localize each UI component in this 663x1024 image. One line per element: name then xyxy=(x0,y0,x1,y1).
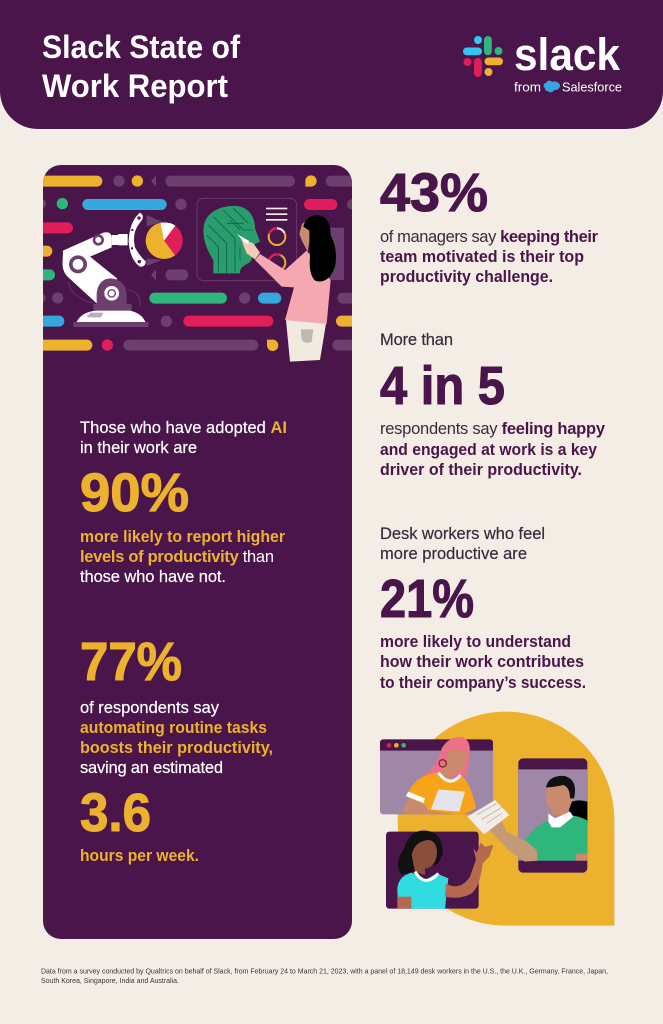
text block: managers stat: of managers say keeping their xyxy=(380,228,599,246)
text block: AI adoption: Those who have adopted AI xyxy=(80,419,287,437)
panel: AI and automation xyxy=(33,165,364,939)
text block: automation: boosts their productivity, xyxy=(80,739,273,757)
screen xyxy=(197,198,297,281)
text block: happiness stat xyxy=(380,331,606,479)
window 1 xyxy=(380,739,493,814)
text block: managers stat xyxy=(380,163,599,286)
text block: desk workers stat xyxy=(380,525,586,692)
text block: desk workers stat: 21% xyxy=(380,569,474,629)
text block: happiness stat: driver of their productivity. xyxy=(380,461,582,479)
text block: desk workers stat: more likely to understand xyxy=(380,633,571,651)
text block: hours saved xyxy=(80,783,199,865)
window 3 xyxy=(386,832,479,909)
text block: managers stat: 43% xyxy=(380,163,488,223)
stat: 77%: 77% xyxy=(80,632,182,692)
illustration: video call colleagues xyxy=(380,712,614,926)
header banner xyxy=(0,0,663,129)
text block: hours saved: 3.6 xyxy=(80,783,151,843)
text block: happiness stat: respondents say feeling happy xyxy=(380,420,606,438)
robot xyxy=(68,282,93,303)
footnote xyxy=(41,966,608,985)
arm and document xyxy=(489,819,538,862)
logo wordmark: Salesforce xyxy=(562,80,622,94)
text block: AI adoption: more likely to report higher xyxy=(80,528,286,546)
text block: happiness stat: More than xyxy=(380,331,453,349)
footnote: Data from a survey conducted by Qualtrics on behalf of Slack, from February 24 to March 21, 2023, with a panel of 18,149 desk workers in the U.S., the U.K., Germany, France, Japan, xyxy=(41,966,608,976)
text block: hours saved: hours per week. xyxy=(80,847,199,865)
text block: automation: of respondents say xyxy=(80,699,220,717)
text block: managers stat: team motivated is their top xyxy=(380,248,584,266)
text block: AI adoption: those who have not. xyxy=(80,568,226,586)
text block: automation xyxy=(80,632,273,777)
illustration: robot arm and woman with AI screen xyxy=(33,175,364,362)
logo wordmark: slack xyxy=(514,29,621,80)
text block: happiness stat: 4 in 5 xyxy=(380,356,505,416)
text block: happiness stat: and engaged at work is a key xyxy=(380,441,598,459)
text block: desk workers stat: to their company’s success. xyxy=(380,674,586,692)
woman xyxy=(286,320,326,362)
text block: desk workers stat: Desk workers who feel xyxy=(380,525,545,543)
title: Work Report xyxy=(42,68,228,104)
title xyxy=(42,29,240,104)
text block: managers stat: productivity challenge. xyxy=(380,268,553,286)
text block: desk workers stat: more productive are xyxy=(380,545,527,563)
text block: AI adoption: levels of productivity than xyxy=(80,548,274,566)
title: Slack State of xyxy=(42,29,240,65)
stat: 90%: 90% xyxy=(80,463,189,523)
text block: desk workers stat: how their work contributes xyxy=(380,653,584,671)
text block: automation: automating routine tasks xyxy=(80,719,267,737)
logo wordmark: from xyxy=(514,80,541,94)
text block: AI adoption xyxy=(80,419,287,586)
footnote: South Korea, Singapore, India and Australia. xyxy=(41,976,179,985)
icon: slack logo mark xyxy=(463,36,503,77)
text block: automation: saving an estimated xyxy=(80,759,223,777)
window 2 xyxy=(518,758,587,873)
text block: AI adoption: in their work are xyxy=(80,439,197,457)
